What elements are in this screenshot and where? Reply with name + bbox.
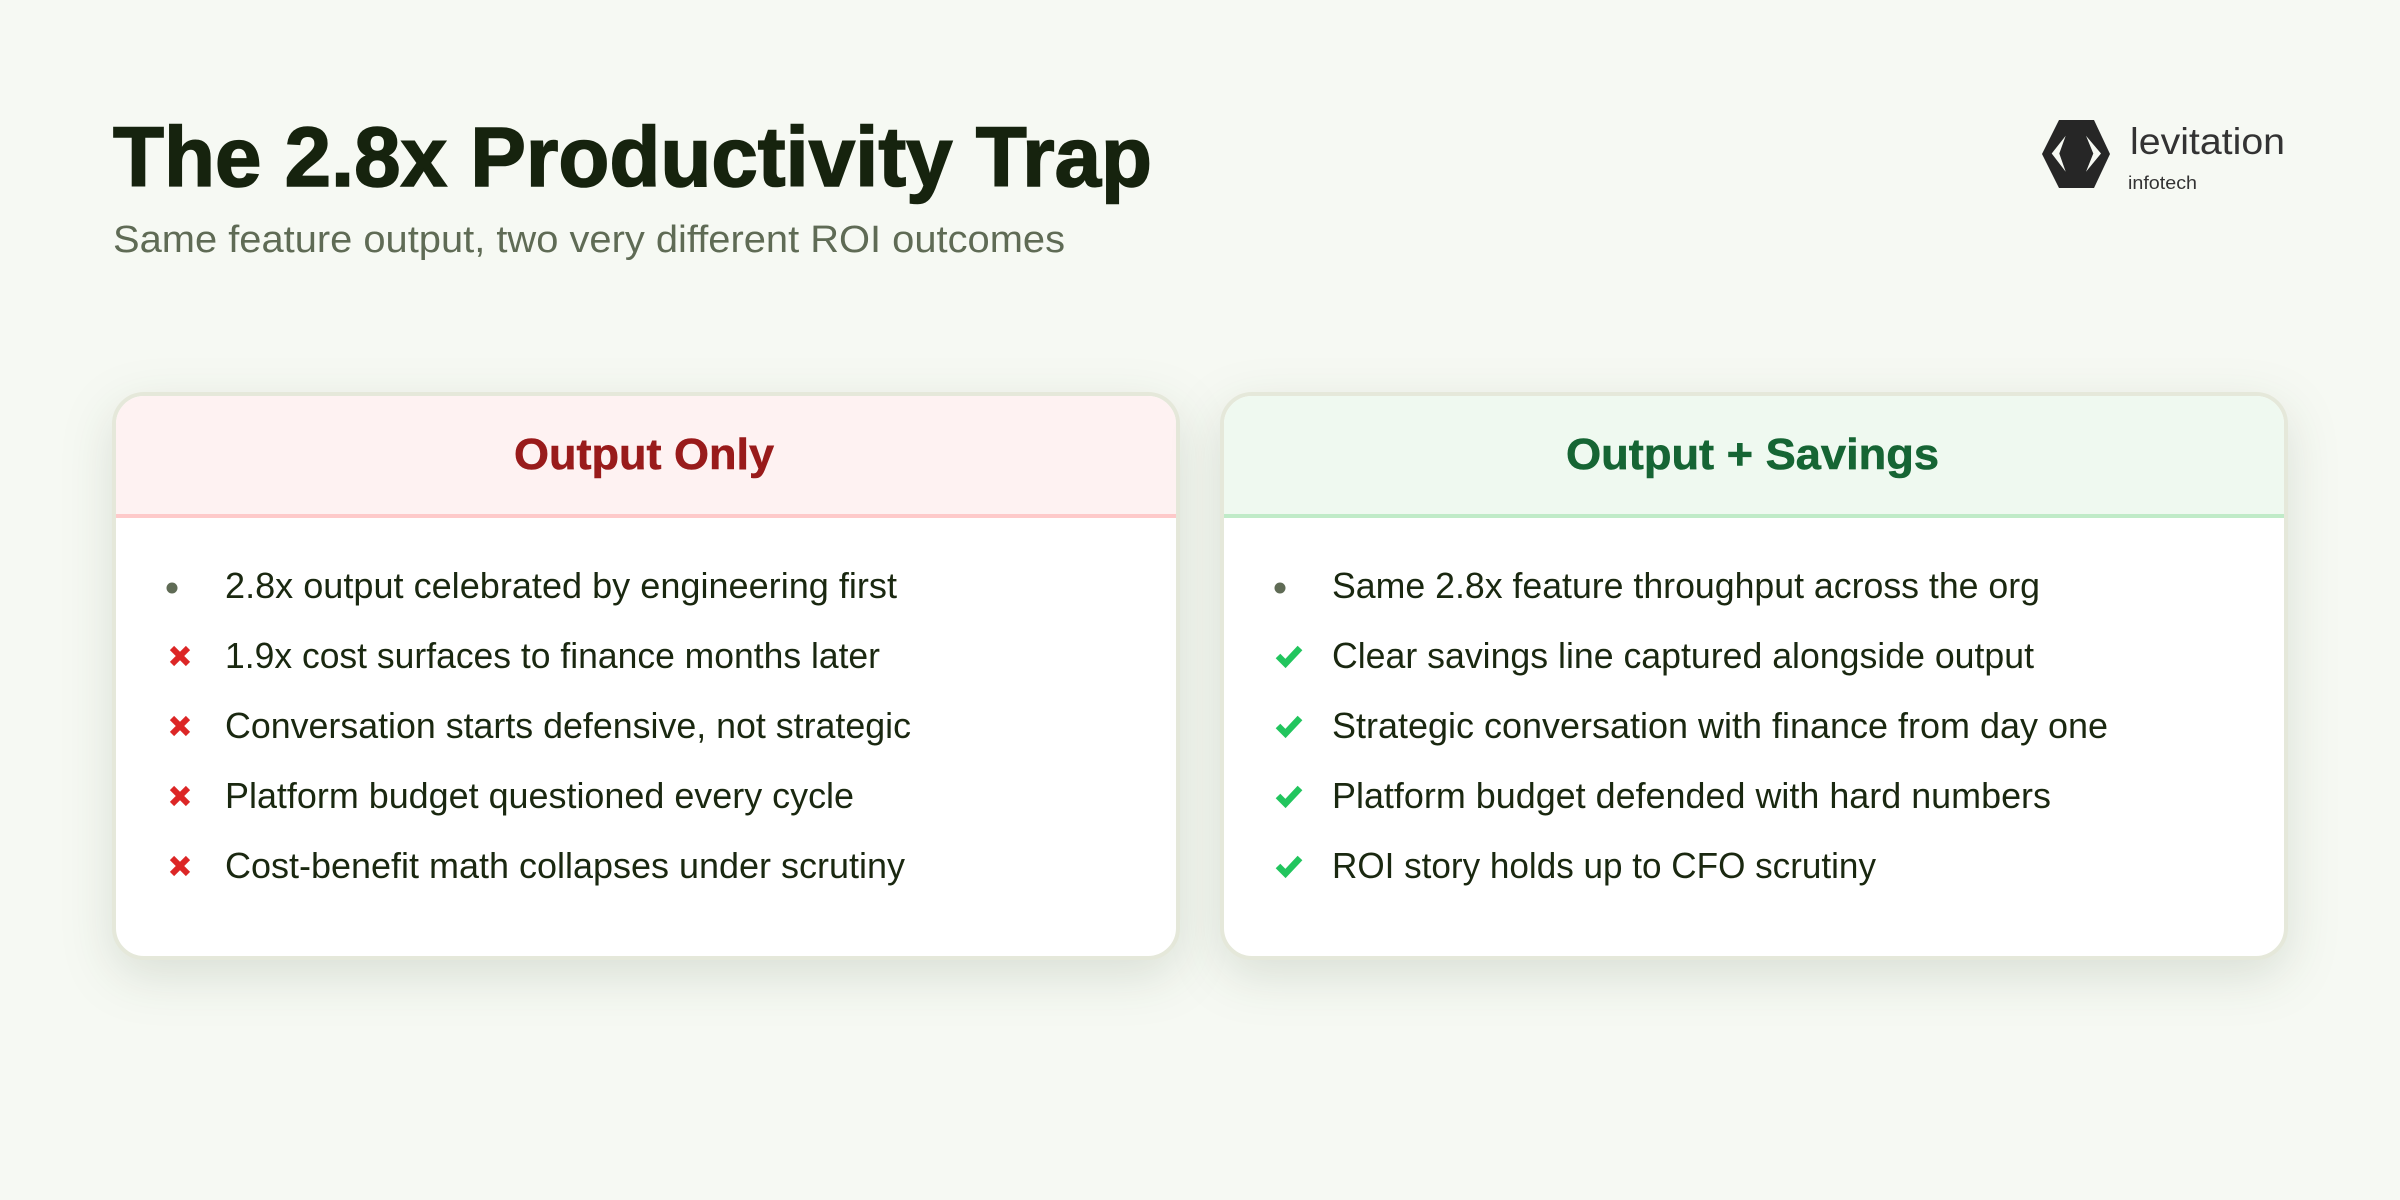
list item: neutral bullet: 2.8x output celebrated by engineering first: [225, 565, 897, 606]
list item: cross: Cost-benefit math collapses under scrutiny: [225, 845, 905, 886]
title: The 2.8x Productivity Trap: [113, 110, 1152, 204]
list item: check: Clear savings line captured alongside output: [1332, 635, 2034, 676]
card background: [114, 394, 1178, 958]
list item: check: Strategic conversation with finance from day one: [1332, 705, 2108, 746]
panel header: output only: [116, 396, 1176, 518]
list item: cross: Conversation starts defensive, not strategic: [225, 705, 911, 746]
panel: output only: [114, 394, 1178, 958]
list item: cross: Platform budget questioned every cycle: [225, 775, 854, 816]
panel header: output only: Output Only: [514, 430, 775, 479]
logo: levitation infotech: [2042, 120, 2285, 193]
panel: output + savings: [1222, 394, 2286, 958]
logo sub-wordmark: infotech: [2128, 173, 2197, 193]
card background: [1222, 394, 2286, 958]
icon: hexagon logo mark: [2042, 120, 2110, 188]
list item: check: ROI story holds up to CFO scrutiny: [1332, 845, 1876, 886]
list item: neutral bullet: Same 2.8x feature throughput across the org: [1332, 565, 2040, 606]
logo wordmark: levitation: [2130, 121, 2285, 162]
list item: check: Platform budget defended with hard numbers: [1332, 775, 2051, 816]
panel header: output + savings: [1224, 396, 2284, 518]
list item: cross: 1.9x cost surfaces to finance months later: [225, 635, 880, 676]
subtitle: Same feature output, two very different ROI outcomes: [113, 219, 1065, 261]
panel header: output + savings: Output + Savings: [1566, 430, 1939, 479]
